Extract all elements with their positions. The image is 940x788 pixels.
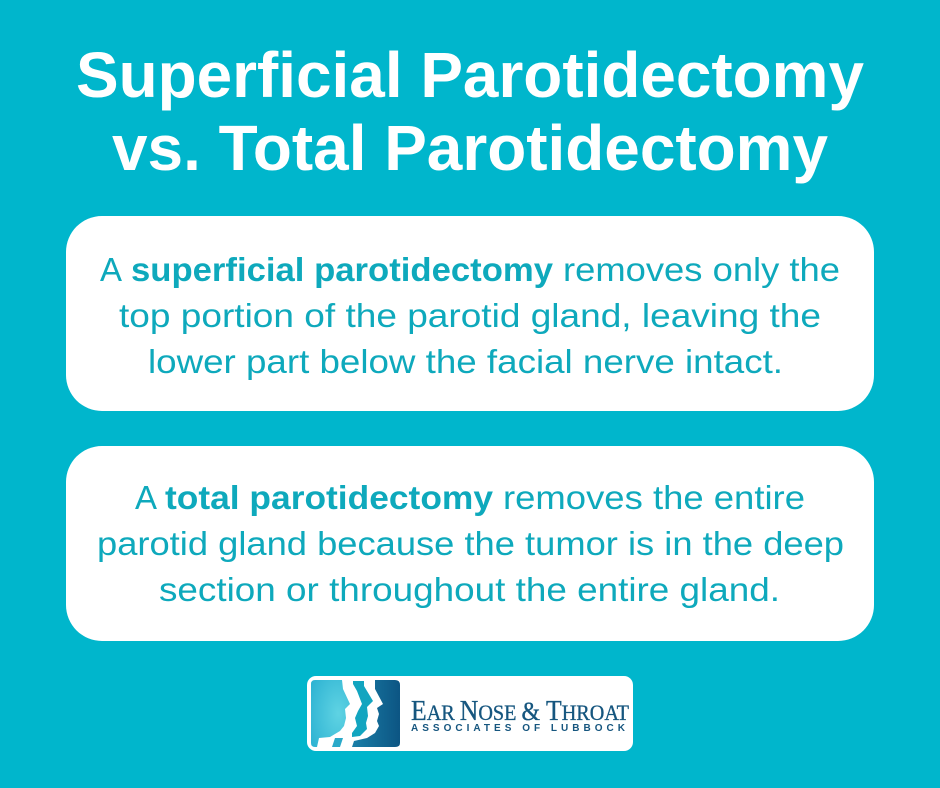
text block: superficial description: superficial parotidectomy (131, 251, 554, 288)
panel: superficial parotidectomy (66, 216, 874, 411)
title (76, 39, 864, 184)
logo: Ear Nose & Throat Associates of Lubbock (307, 676, 633, 751)
text block: superficial description: A (100, 251, 122, 288)
text block: superficial description: removes only the (563, 251, 840, 288)
title: Superficial Parotidectomy (76, 39, 864, 111)
text block: superficial description (100, 251, 840, 380)
text block: total description: removes the entire (503, 479, 805, 516)
text block: superficial description: top portion of the parotid gland, leaving the (119, 297, 821, 334)
text block: total description (97, 479, 844, 608)
panel: total parotidectomy (66, 446, 874, 641)
text block: superficial description: lower part below the facial nerve intact. (148, 343, 783, 380)
text block: total description: total parotidectomy (165, 479, 494, 516)
text block: total description: A (135, 479, 157, 516)
icon: overlapping face profiles (311, 680, 400, 747)
title: vs. Total Parotidectomy (112, 112, 828, 184)
logo wordmark: EAR NOSE & THROAT (411, 696, 630, 727)
text block: total description: parotid gland because the tumor is in the deep (97, 525, 844, 562)
logo tagline: ASSOCIATES OF LUBBOCK (411, 723, 626, 734)
text block: total description: section or throughout the entire gland. (159, 571, 780, 608)
